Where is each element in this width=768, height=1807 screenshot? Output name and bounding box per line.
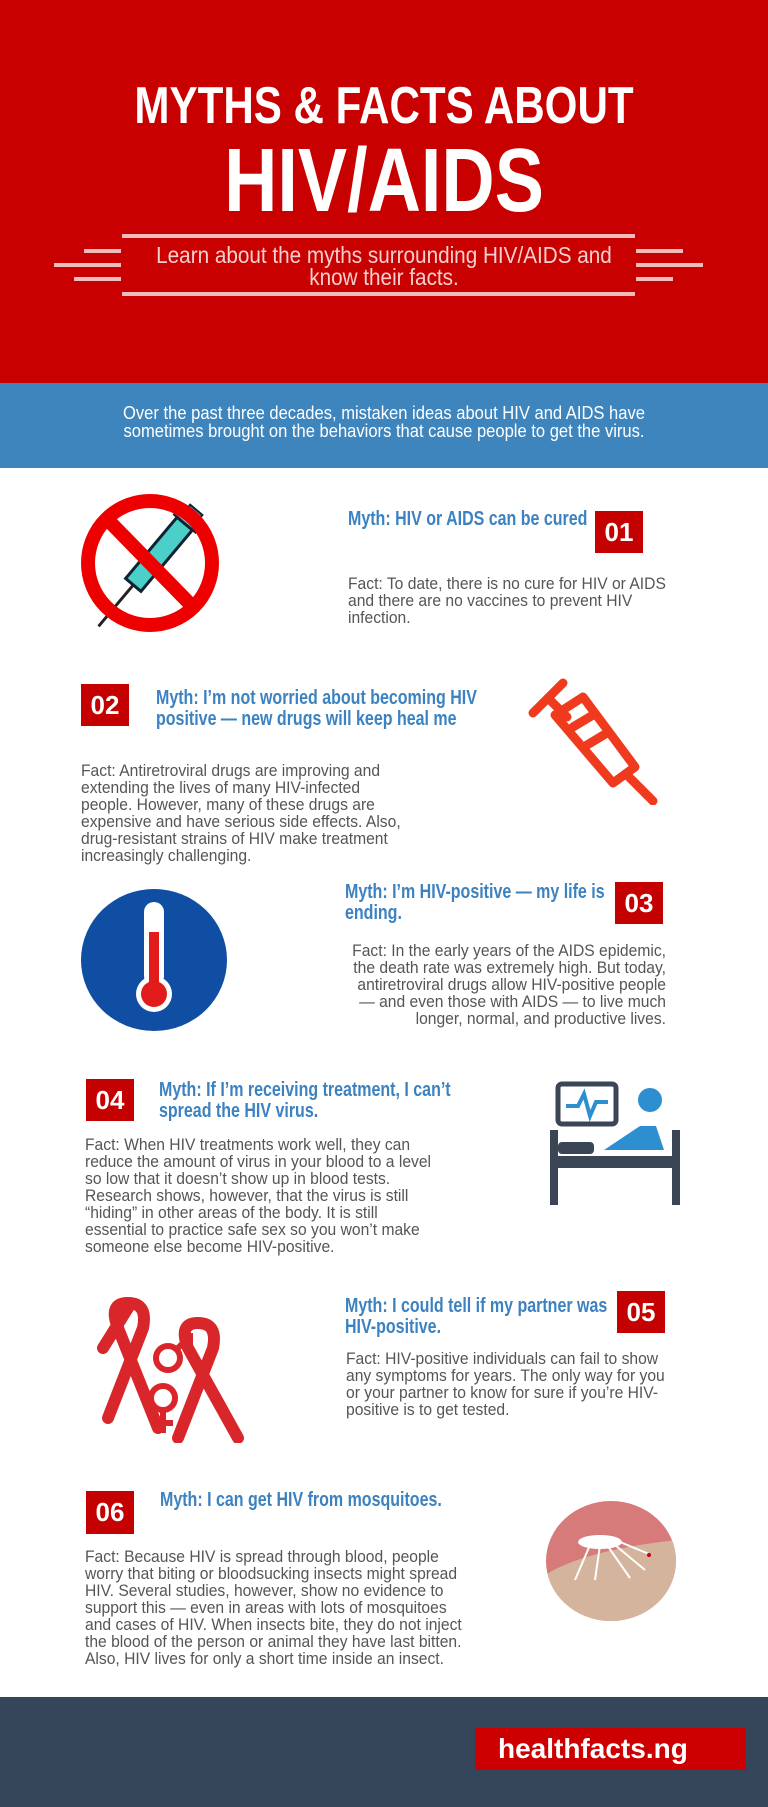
- fact 5: or your partner to know for sure if you’re HIV-: [346, 1383, 658, 1402]
- section 6: [85, 1489, 676, 1668]
- fact 4: Fact: When HIV treatments work well, they can: [85, 1135, 410, 1154]
- icon: ribbons with gender symbols: [97, 1297, 244, 1443]
- fact 1: [348, 574, 666, 627]
- fact 4: “hiding” in other areas of the body. It is still: [85, 1203, 378, 1222]
- intro text: Over the past three decades, mistaken ideas about HIV and AIDS have: [123, 403, 645, 423]
- number 05: 05: [627, 1297, 655, 1327]
- icon: no syringe: [81, 494, 219, 632]
- myth heading 5: [345, 1295, 607, 1338]
- footer: [0, 1697, 768, 1807]
- icon: hospital bed monitor: [550, 1082, 680, 1205]
- myth heading 3: [345, 881, 605, 924]
- fact 4: so low that it doesn’t show up in blood tests.: [85, 1169, 390, 1188]
- number 05: [617, 1291, 665, 1333]
- fact 6: Also, HIV lives for only a short time inside an insect.: [85, 1649, 444, 1668]
- section 3: [81, 881, 666, 1031]
- section 4: [85, 1079, 680, 1256]
- title line 2: HIV/AIDS: [224, 131, 544, 231]
- number 04: [86, 1079, 134, 1121]
- fact 2: Fact: Antiretroviral drugs are improving and: [81, 761, 380, 780]
- header panel: [0, 0, 768, 383]
- section 5: [97, 1291, 665, 1443]
- fact 5: positive is to get tested.: [346, 1400, 509, 1419]
- number 02: 02: [91, 690, 119, 720]
- fact 2: [81, 761, 401, 865]
- number 02: [81, 684, 129, 726]
- intro text: [123, 403, 645, 441]
- fact 1: Fact: To date, there is no cure for HIV or AIDS: [348, 574, 666, 593]
- myth heading 2: [156, 687, 477, 730]
- title line 1: MYTHS & FACTS ABOUT: [134, 77, 634, 135]
- subtitle: know their facts.: [309, 264, 459, 290]
- fact 4: essential to practice safe sex so you won’t make: [85, 1220, 420, 1239]
- myth heading 3: Myth: I’m HIV-positive — my life is: [345, 881, 605, 903]
- myth heading 4: spread the HIV virus.: [159, 1100, 318, 1122]
- fact 2: expensive and have serious side effects. Also,: [81, 812, 401, 831]
- number 01: [595, 511, 643, 553]
- fact 2: extending the lives of many HIV-infected: [81, 778, 360, 797]
- fact 6: the blood of the person or animal they have last bitten.: [85, 1632, 461, 1651]
- fact 6: [85, 1547, 462, 1668]
- myth heading 6: Myth: I can get HIV from mosquitoes.: [160, 1489, 442, 1511]
- fact 6: HIV. Several studies, however, show no evidence to: [85, 1581, 443, 1600]
- icon: red syringe: [528, 678, 658, 805]
- fact 2: people. However, many of these drugs are: [81, 795, 375, 814]
- footer brand box: healthfacts.ng: [498, 1733, 688, 1764]
- fact 4: reduce the amount of virus in your blood to a level: [85, 1152, 431, 1171]
- fact 3: [352, 941, 666, 1028]
- fact 5: any symptoms for years. The only way for you: [346, 1366, 665, 1385]
- fact 1: infection.: [348, 608, 411, 627]
- fact 3: — and even those with AIDS — to live much: [359, 992, 666, 1011]
- footer brand box: [475, 1728, 746, 1770]
- myth heading 4: Myth: If I’m receiving treatment, I can’t: [159, 1079, 451, 1101]
- number 06: [86, 1491, 134, 1534]
- fact 2: drug-resistant strains of HIV make treatment: [81, 829, 388, 848]
- fact 6: Fact: Because HIV is spread through blood, people: [85, 1547, 439, 1566]
- fact 3: Fact: In the early years of the AIDS epidemic,: [352, 941, 666, 960]
- fact 3: longer, normal, and productive lives.: [416, 1009, 666, 1028]
- fact 2: increasingly challenging.: [81, 846, 251, 865]
- section 2: [81, 678, 658, 865]
- myth heading 4: [159, 1079, 451, 1122]
- icon: mosquito: [546, 1501, 676, 1621]
- number 03: [615, 882, 663, 924]
- icon: thermometer: [81, 889, 227, 1031]
- number 06: 06: [96, 1497, 124, 1527]
- fact 3: the death rate was extremely high. But today,: [353, 958, 666, 977]
- myth heading 1: Myth: HIV or AIDS can be cured: [348, 508, 587, 530]
- fact 1: and there are no vaccines to prevent HIV: [348, 591, 632, 610]
- fact 6: support this — even in areas with lots of mosquitoes: [85, 1598, 447, 1617]
- myth heading 3: ending.: [345, 902, 402, 924]
- fact 5: [346, 1349, 665, 1419]
- subtitle: Learn about the myths surrounding HIV/AIDS and: [156, 242, 612, 268]
- number 04: 04: [96, 1085, 124, 1115]
- number 01: 01: [605, 517, 633, 547]
- myth heading 2: positive — new drugs will keep heal me: [156, 708, 457, 730]
- section 1: [81, 494, 666, 632]
- fact 6: worry that biting or bloodsucking insects might spread: [85, 1564, 457, 1583]
- fact 6: and cases of HIV. When insects bite, they do not inject: [85, 1615, 462, 1634]
- fact 4: [85, 1135, 431, 1256]
- myth heading 2: Myth: I’m not worried about becoming HIV: [156, 687, 477, 709]
- number 03: 03: [625, 888, 653, 918]
- intro text: sometimes brought on the behaviors that cause people to get the virus.: [123, 421, 645, 441]
- fact 4: someone else become HIV-positive.: [85, 1237, 335, 1256]
- subtitle: [156, 242, 612, 290]
- fact 3: antiretroviral drugs allow HIV-positive people: [357, 975, 666, 994]
- myth heading 5: HIV-positive.: [345, 1316, 441, 1338]
- myth heading 5: Myth: I could tell if my partner was: [345, 1295, 607, 1317]
- fact 4: Research shows, however, that the virus is still: [85, 1186, 408, 1205]
- intro band: [0, 383, 768, 468]
- fact 5: Fact: HIV-positive individuals can fail to show: [346, 1349, 658, 1368]
